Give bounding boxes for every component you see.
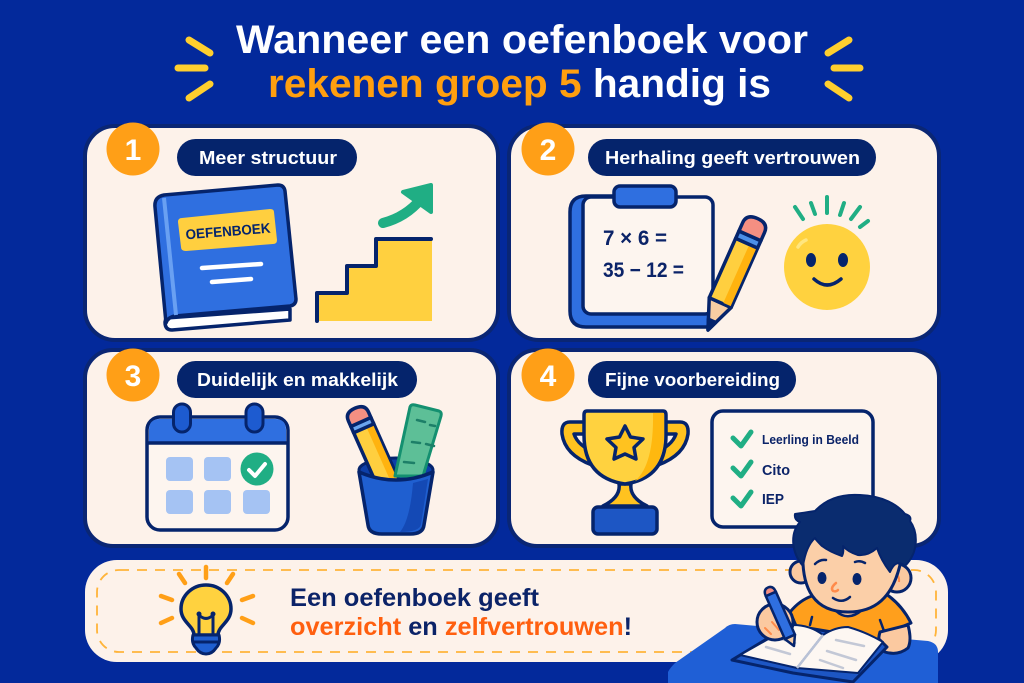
writing pencil: [763, 585, 799, 648]
heading pill 4: Fijne voorbereiding: [605, 370, 780, 390]
icon: left title sparks: [178, 40, 210, 98]
heading pill 2: [588, 139, 876, 176]
heading pill 1: Meer structuur: [199, 148, 337, 168]
icon: light bulb: [161, 567, 253, 654]
icon: growth arrow: [383, 185, 431, 223]
badge 4: [522, 348, 574, 402]
face: [803, 530, 900, 612]
heading pill 3: [177, 361, 417, 398]
illustration: boy writing at desk: [668, 495, 938, 683]
icon: trophy: [562, 411, 688, 534]
icon: clipboard with sums: 35 − 12 =: [603, 259, 684, 282]
title: Wanneer een oefenboek voor: [236, 18, 808, 62]
banner: conclusion: [85, 560, 948, 662]
title: rekenen groep 5 handig is: [268, 62, 771, 106]
icon: right title sparks: [828, 40, 860, 98]
shirt folds and collar: [810, 617, 884, 631]
icon: pencil: [697, 214, 769, 335]
checklist card: Cito: [762, 463, 790, 479]
icon: workbook: OEFENBOEK: [185, 220, 271, 242]
icon: pencil cup: [345, 404, 441, 534]
checklist card: IEP: [762, 492, 784, 508]
banner text: overzicht en zelfvertrouwen!: [290, 613, 632, 641]
panel 2: herhaling geeft vertrouwen: [509, 122, 939, 340]
heading pill 4: [588, 361, 796, 398]
banner text: Een oefenboek geeft: [290, 584, 540, 612]
facial features: [815, 560, 865, 601]
heading pill 3: Duidelijk en makkelijk: [197, 370, 399, 390]
neck: [836, 610, 862, 616]
badge 1: [106, 122, 160, 176]
desk: [668, 624, 938, 683]
badge 3: [106, 348, 160, 402]
open book: [732, 625, 887, 682]
icon: stairs: [317, 239, 432, 321]
checklist card: [712, 411, 873, 527]
icon: smiley: [784, 197, 870, 310]
shirt: [790, 594, 911, 642]
panel 1: meer structuur: [85, 122, 498, 340]
badge 3: 3: [125, 360, 141, 393]
badge 2: 2: [540, 134, 556, 167]
right arm: [879, 625, 910, 653]
banner text: [290, 584, 632, 641]
icon: clipboard with sums: [570, 186, 713, 327]
panel 3: duidelijk en makkelijk: [85, 348, 498, 546]
badge 1: 1: [125, 134, 141, 167]
icon: clipboard with sums: 7 × 6 =: [603, 227, 667, 250]
hand: [757, 604, 793, 640]
badge 4: 4: [540, 360, 557, 393]
ears: [790, 561, 911, 592]
heading pill 2: Herhaling geeft vertrouwen: [605, 148, 860, 168]
title: [236, 18, 808, 106]
panel 4: fijne voorbereiding: [509, 348, 939, 546]
hair: [793, 495, 916, 572]
badge 2: [522, 122, 574, 176]
heading pill 1: [177, 139, 357, 176]
icon: workbook: [155, 185, 296, 330]
checklist card: Leerling in Beeld: [762, 432, 859, 447]
icon: calendar: [147, 404, 288, 530]
